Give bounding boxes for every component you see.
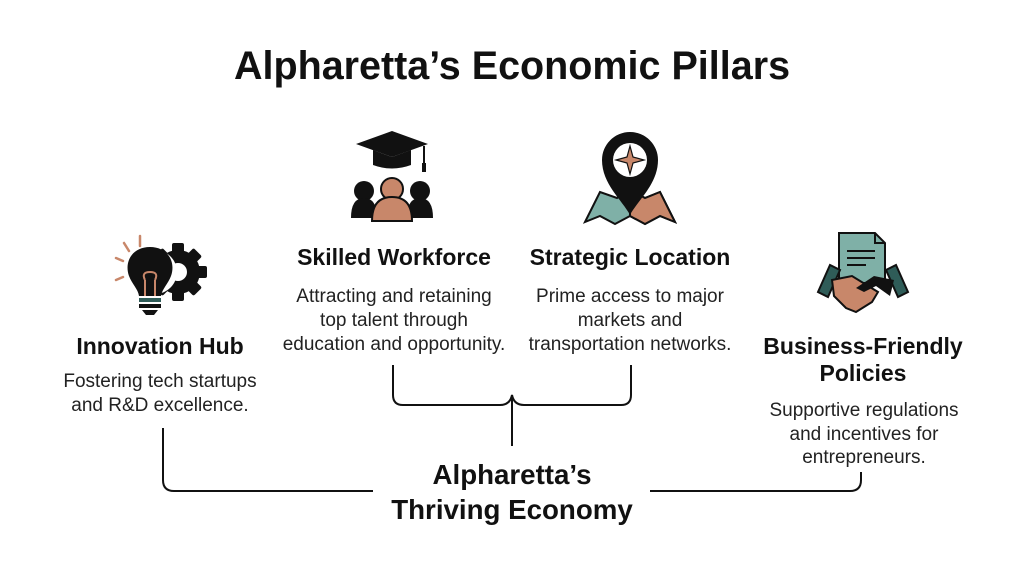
panel: skilled workforce: [283, 244, 505, 355]
panel: business-friendly policies: [763, 333, 963, 468]
heading: thriving economy: Thriving Economy: [391, 494, 633, 525]
icon: handshake with document: [818, 233, 908, 312]
panel: strategic location: [529, 244, 731, 355]
panel: business-friendly policies: Policies: [820, 360, 906, 386]
icon: map pin: [585, 132, 675, 224]
panel: business-friendly policies: and incentives for: [790, 424, 939, 445]
panel: strategic location: Strategic Location: [530, 244, 730, 270]
panel: skilled workforce: Attracting and retaining: [296, 286, 492, 307]
connector lines: [163, 365, 861, 491]
panel: business-friendly policies: entrepreneurs.: [802, 447, 926, 468]
panel: innovation hub: and R&D excellence.: [71, 395, 249, 416]
panel: innovation hub: [63, 333, 257, 416]
panel: skilled workforce: Skilled Workforce: [297, 244, 491, 270]
panel: business-friendly policies: Business-Friendly: [763, 333, 963, 359]
heading: thriving economy: Alpharetta’s: [432, 459, 592, 490]
panel: skilled workforce: top talent through: [320, 310, 468, 331]
heading: thriving economy: [391, 459, 633, 525]
icon: lightbulb and gear: [116, 236, 207, 315]
panel: innovation hub: Fostering tech startups: [63, 371, 257, 392]
panel: strategic location: markets and: [578, 310, 682, 331]
panel: strategic location: Prime access to major: [536, 286, 725, 307]
panel: strategic location: transportation networks.: [529, 334, 731, 355]
title: Alpharetta’s Economic Pillars: [234, 44, 790, 88]
panel: skilled workforce: education and opportunity.: [283, 334, 505, 355]
icon: graduation team: [351, 131, 433, 221]
panel: business-friendly policies: Supportive regulations: [769, 400, 959, 421]
panel: innovation hub: Innovation Hub: [76, 333, 244, 359]
